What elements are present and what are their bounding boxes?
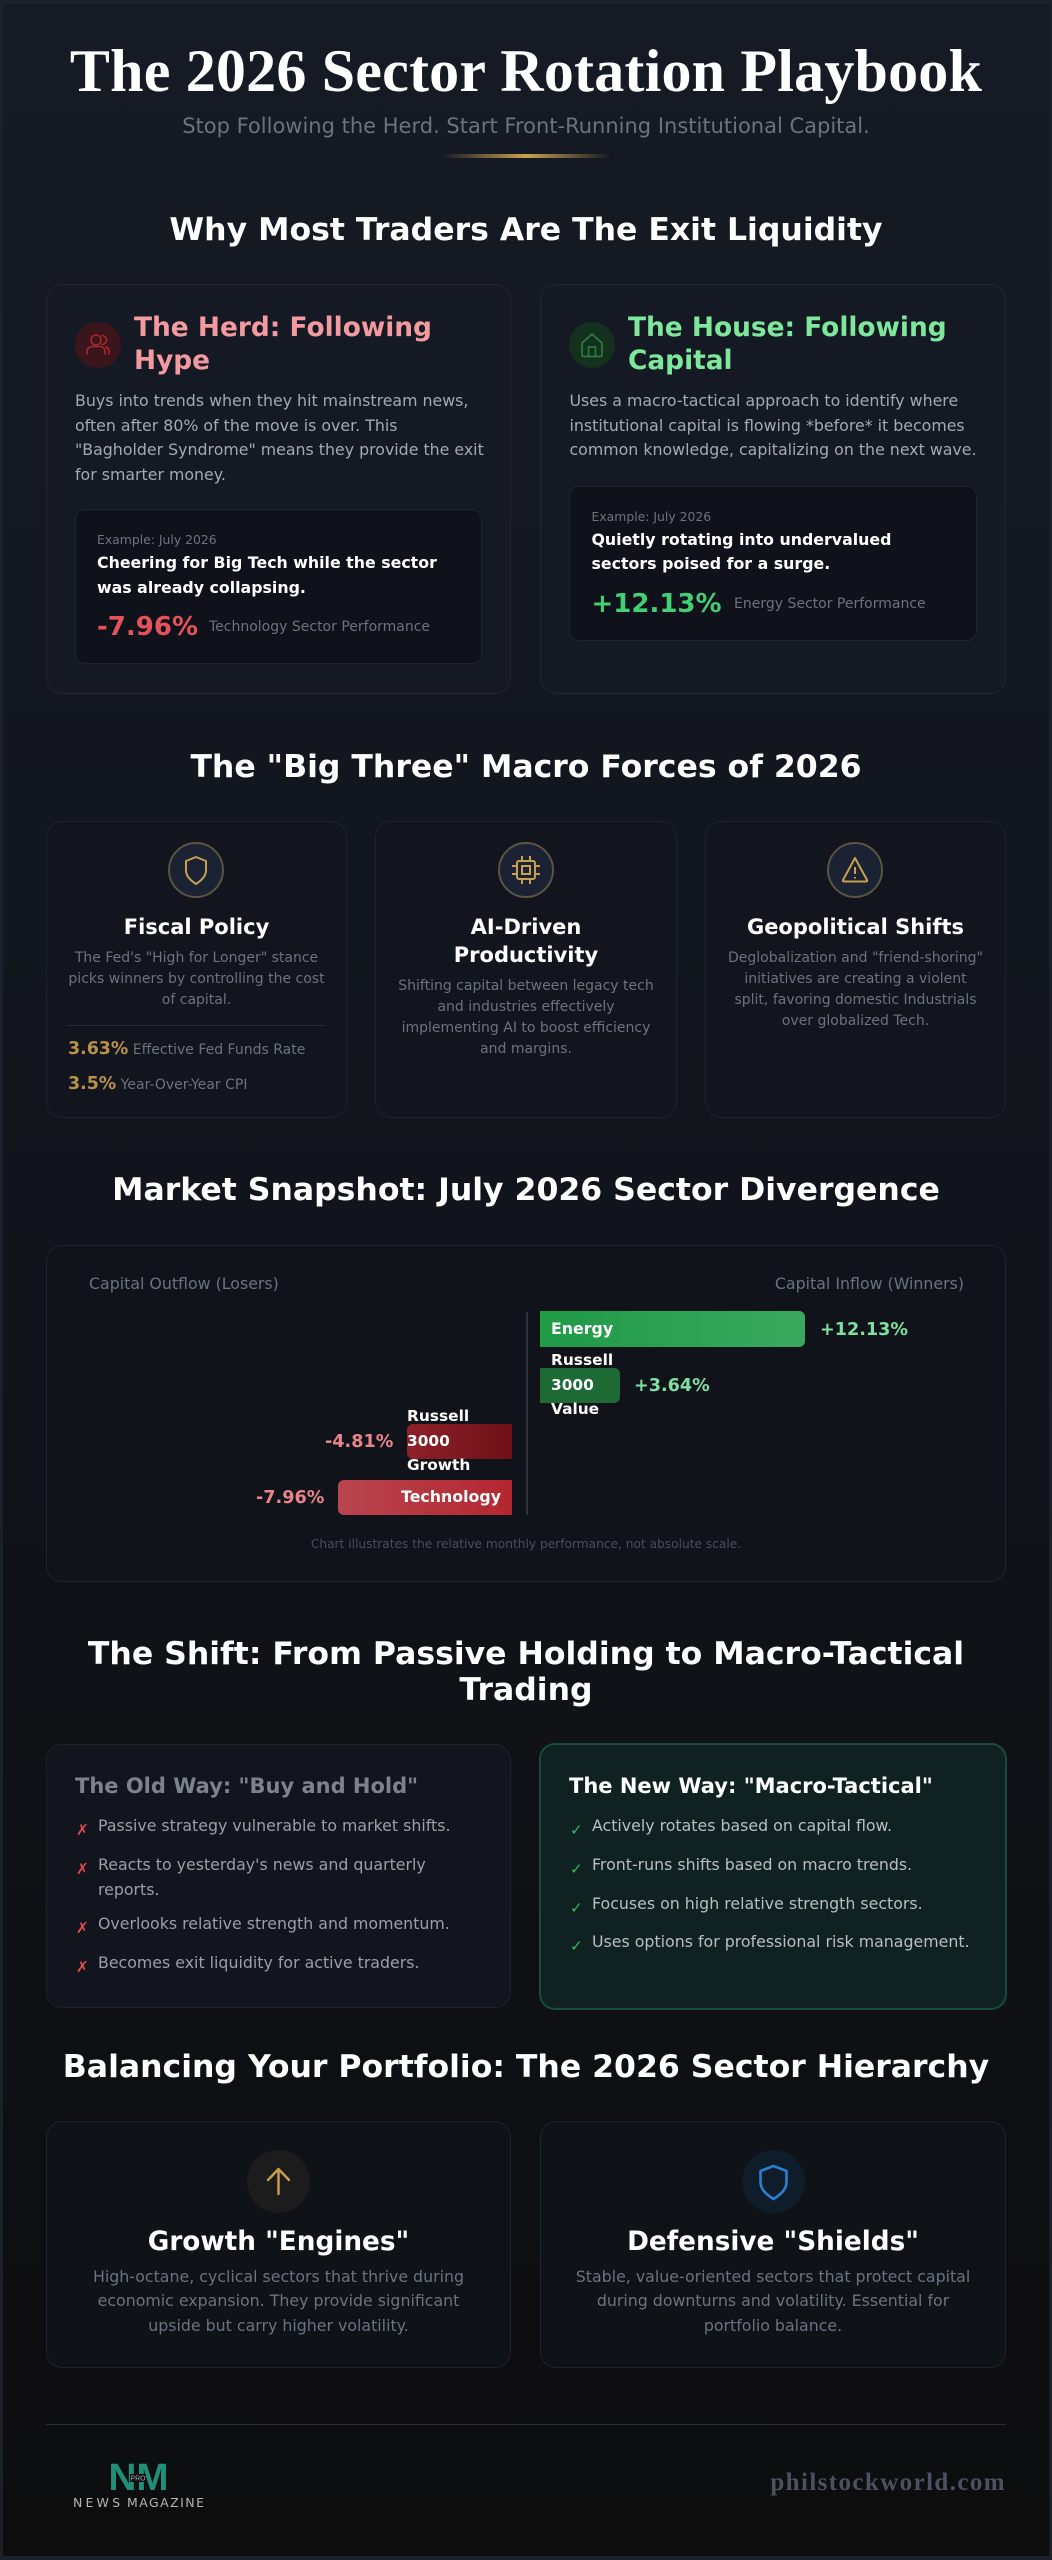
callout: house example	[569, 486, 977, 640]
heading: exit liquidity: Why Most Traders Are The Exit Liquidity	[169, 212, 883, 248]
bar label: russell growth: Russell	[407, 1407, 469, 1425]
label: outflow: Capital Outflow (Losers)	[89, 1274, 279, 1293]
icon: arrow up	[247, 2150, 310, 2213]
heading: the shift: The Shift: From Passive Holding to Macro-Tactical	[88, 1636, 964, 1672]
axis	[526, 1312, 528, 1515]
text: herd description: Buys into trends when they hit mainstream news,	[75, 391, 468, 410]
panel: growth engines	[46, 2121, 511, 2368]
card title: Geopolitical Shifts	[747, 915, 964, 939]
stat: cpi: 3.5% Year-Over-Year CPI	[68, 1074, 247, 1094]
bar label: russell value: Value	[551, 1400, 599, 1418]
card title: Defensive "Shields"	[627, 2227, 919, 2257]
text: herd description: for smarter money.	[75, 464, 226, 484]
panel: the herd	[46, 284, 511, 694]
divider	[67, 1025, 325, 1026]
card description: and margins.	[480, 1041, 572, 1057]
card description: Shifting capital between legacy tech	[398, 978, 654, 994]
card description: during downturns and volatility. Essential for	[597, 2291, 949, 2310]
stat: -7.96%: -7.96%	[97, 612, 198, 642]
bar label: russell growth: Growth	[407, 1456, 470, 1474]
example label: Example: July 2026	[97, 532, 217, 547]
card title: Growth "Engines"	[148, 2227, 409, 2257]
stat label: Technology Sector Performance	[209, 619, 430, 635]
heading: big three: The "Big Three" Macro Forces of 2026	[190, 749, 862, 785]
card description	[68, 950, 325, 1008]
item: Uses options for professional risk management.	[592, 1932, 970, 1951]
item: Becomes exit liquidity for active traders.	[98, 1953, 419, 1972]
marker: ✓	[570, 1898, 583, 1916]
panel: defensive shields	[540, 2121, 1006, 2368]
heading: herd	[134, 312, 432, 376]
bar: energy	[540, 1311, 805, 1347]
gold divider	[442, 154, 610, 158]
example statement: Quietly rotating into undervalued	[592, 530, 891, 548]
icon: shield	[168, 842, 224, 898]
bar label: russell growth: 3000	[407, 1432, 450, 1450]
old way title: The Old Way: "Buy and Hold"	[75, 1774, 418, 1798]
marker: ✗	[76, 1860, 89, 1878]
heading: herd: The Herd: Following	[134, 312, 432, 342]
card title	[454, 915, 598, 967]
panel: divergence chart	[46, 1245, 1006, 1582]
logo: news magazine: NEWS	[73, 2495, 120, 2510]
heading: the shift	[88, 1636, 964, 1708]
icon: shield	[742, 2150, 805, 2213]
marker: ✓	[570, 1821, 583, 1839]
label: inflow: Capital Inflow (Winners)	[775, 1274, 964, 1293]
card title: Productivity	[454, 943, 598, 967]
bar label: russell growth	[407, 1407, 470, 1474]
marker: ✗	[76, 1919, 89, 1937]
panel: new way	[539, 1743, 1007, 2010]
stat: fed funds: 3.63% Effective Fed Funds Rate	[68, 1039, 305, 1059]
panel: fiscal policy	[46, 821, 347, 1118]
item	[98, 1855, 426, 1898]
card description: High-octane, cyclical sectors that thrive during	[93, 2266, 464, 2286]
subtitle: Stop Following the Herd. Start Front-Running Institutional Capital.	[182, 114, 870, 138]
logo: news magazine: MAGAZINE	[127, 2495, 204, 2510]
example label: Example: July 2026	[592, 508, 711, 524]
card description: Stable, value-oriented sectors that protect capital	[576, 2266, 970, 2286]
marker: ✓	[570, 1937, 583, 1955]
item: Overlooks relative strength and momentum.	[98, 1914, 450, 1933]
panel: ai productivity	[375, 821, 677, 1118]
marker: ✗	[76, 1821, 89, 1839]
card description: over globalized Tech.	[782, 1013, 929, 1029]
heading: the shift: Trading	[459, 1672, 593, 1708]
marker: ✓	[570, 1860, 583, 1878]
value: technology: -7.96%	[256, 1488, 324, 1508]
text: herd description: often after 80% of the move is over. This	[75, 416, 398, 434]
heading: house	[628, 312, 947, 376]
footer url: philstockworld.com	[770, 2469, 1006, 2496]
footer rule	[46, 2424, 1006, 2425]
example statement	[592, 530, 891, 573]
marker: ✗	[76, 1958, 89, 1976]
example statement	[97, 553, 437, 596]
bar label: technology: Technology	[401, 1487, 501, 1506]
icon: warning	[827, 842, 883, 898]
card description: initiatives are creating a violent	[744, 971, 967, 987]
card description: and industries effectively	[437, 999, 615, 1015]
card description: of capital.	[162, 992, 231, 1008]
text: herd description: "Bagholder Syndrome" means they provide the exit	[75, 440, 484, 459]
item: Actively rotates based on capital flow.	[592, 1816, 892, 1835]
example statement: sectors poised for a surge.	[592, 554, 830, 573]
icon: chip	[498, 842, 554, 898]
text: house description: Uses a macro-tactical approach to identify where	[570, 391, 958, 410]
chart note: Chart illustrates the relative monthly performance, not absolute scale.	[311, 1537, 741, 1551]
card description	[576, 2266, 970, 2334]
card description: implementing AI to boost efficiency	[402, 1020, 650, 1036]
item: Reacts to yesterday's news and quarterly	[98, 1855, 426, 1874]
title: The 2026 Sector Rotation Playbook	[70, 38, 982, 104]
item: Front-runs shifts based on macro trends.	[592, 1855, 912, 1874]
logo: news magazine: NM	[108, 2458, 168, 2499]
example statement: Cheering for Big Tech while the sector	[97, 553, 437, 572]
value: russell growth: -4.81%	[325, 1432, 393, 1452]
bar label: russell value	[551, 1351, 613, 1418]
text: house description	[570, 391, 977, 459]
bar: russell value	[540, 1368, 620, 1403]
list: new way	[570, 1816, 970, 1955]
item: Passive strategy vulnerable to market shifts.	[98, 1816, 450, 1835]
card description	[93, 2266, 464, 2334]
card title: Fiscal Policy	[124, 915, 269, 939]
stat label: Energy Sector Performance	[734, 596, 926, 612]
heading: market snapshot: Market Snapshot: July 2026 Sector Divergence	[112, 1172, 940, 1208]
panel: old way	[46, 1744, 511, 2008]
card description: economic expansion. They provide significant	[98, 2291, 459, 2310]
bar: russell growth	[407, 1424, 512, 1459]
text: herd description	[75, 391, 484, 484]
bar: technology	[338, 1480, 512, 1515]
logo: news magazine: PRO	[130, 2476, 146, 2482]
bar label: russell value: Russell	[551, 1351, 613, 1369]
text: house description: institutional capital is flowing *before* it becomes	[570, 416, 965, 434]
heading: house: The House: Following	[628, 312, 947, 342]
card description: split, favoring domestic Industrials	[734, 992, 977, 1008]
card description: picks winners by controlling the cost	[68, 971, 325, 987]
card description	[398, 978, 654, 1057]
heading: house: Capital	[628, 344, 733, 376]
item: Focuses on high relative strength sectors.	[592, 1894, 923, 1912]
icon: people	[75, 322, 121, 368]
card description	[728, 950, 983, 1029]
new way title: The New Way: "Macro-Tactical"	[569, 1774, 933, 1798]
icon: house	[569, 322, 615, 368]
value: russell value: +3.64%	[634, 1376, 710, 1396]
callout: herd example	[75, 509, 482, 664]
heading: herd: Hype	[134, 344, 210, 376]
card description: Deglobalization and "friend-shoring"	[728, 950, 983, 966]
list: old way	[76, 1816, 450, 1976]
text: house description: common knowledge, capitalizing on the next wave.	[570, 440, 977, 459]
card description: upside but carry higher volatility.	[148, 2316, 409, 2334]
card description: The Fed's "High for Longer" stance	[75, 950, 318, 966]
stat: +12.13%: +12.13%	[592, 588, 722, 618]
panel: geopolitical shifts	[705, 821, 1006, 1118]
item: reports.	[98, 1880, 160, 1898]
card title: AI-Driven	[471, 915, 581, 939]
heading: balancing: Balancing Your Portfolio: The 2026 Sector Hierarchy	[63, 2049, 989, 2085]
panel: the house	[540, 284, 1006, 694]
value: energy: +12.13%	[820, 1320, 908, 1340]
card description: portfolio balance.	[704, 2316, 842, 2334]
logo: news magazine	[73, 2458, 204, 2510]
bar label: energy: Energy	[551, 1319, 613, 1338]
bar label: russell value: 3000	[551, 1376, 594, 1394]
example statement: was already collapsing.	[97, 578, 306, 596]
